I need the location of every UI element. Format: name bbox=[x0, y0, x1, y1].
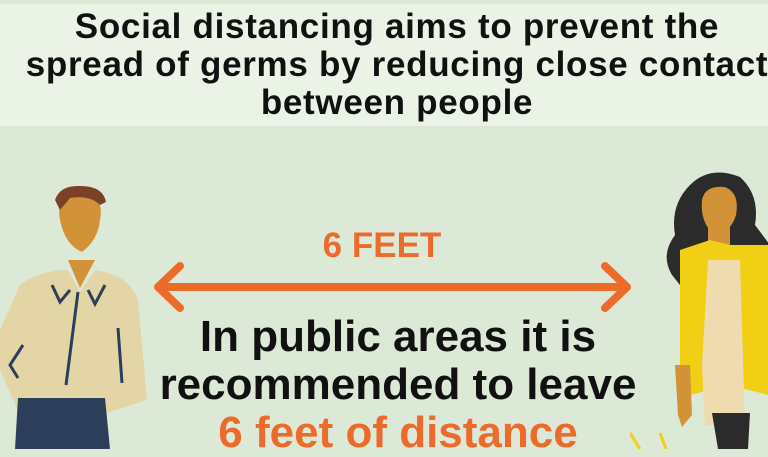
title: between people bbox=[261, 83, 533, 122]
icon: woman figure bbox=[630, 172, 768, 449]
icon: man figure bbox=[0, 186, 147, 449]
title: spread of germs by reducing close contact bbox=[26, 45, 768, 84]
main text: 6 feet of distance bbox=[218, 408, 578, 457]
header band bbox=[0, 4, 768, 126]
main text: recommended to leave bbox=[160, 360, 636, 409]
label: 6 FEET: 6 FEET bbox=[323, 226, 441, 265]
main text bbox=[160, 312, 636, 457]
main text: In public areas it is bbox=[200, 312, 596, 361]
title bbox=[26, 7, 768, 122]
arrow: 6 feet bbox=[154, 262, 631, 312]
title: Social distancing aims to prevent the bbox=[75, 7, 719, 46]
